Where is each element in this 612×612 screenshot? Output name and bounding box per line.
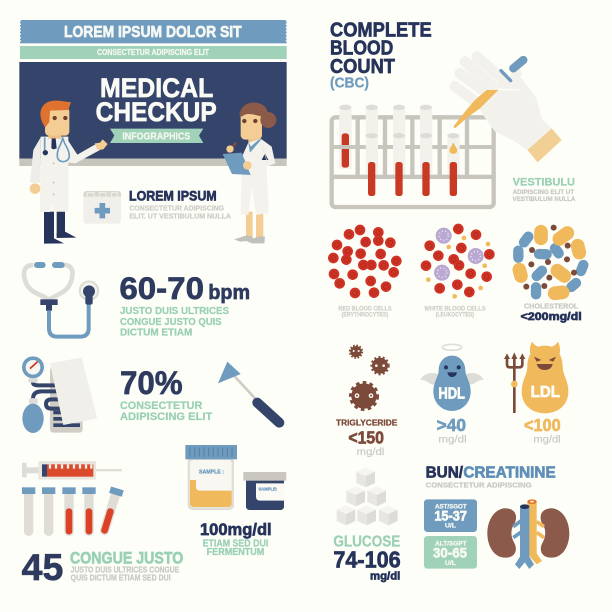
stat: 100mg/dl: ETIAM SED DUI: [203, 539, 269, 550]
label: cholesterol: CHOLESTEROL: [524, 304, 579, 311]
stat: triglyceride: [336, 418, 398, 458]
card: alt sgpt: [424, 536, 477, 569]
label: red blood cells: [338, 306, 392, 319]
icon: sample cup: [185, 445, 237, 510]
icon: sample container: [243, 472, 286, 510]
heading: bun creatinine: CONSECTETUR ADIPISCING: [426, 481, 532, 490]
panel: heart rate and blood pressure: [22, 262, 279, 433]
card: alt sgpt: 30-65: [433, 544, 467, 560]
male doctor: [30, 101, 108, 244]
stat: glucose: GLUCOSE: [333, 534, 400, 551]
text block: vestibulu: VESTIBULU: [513, 177, 575, 189]
text block: vestibulu: [513, 177, 576, 203]
heading: complete blood count: BLOOD: [330, 37, 393, 59]
stat: heart rate: [119, 271, 250, 339]
stat: 45 congue justo: JUSTO DUIS ULTRICES CONGUE: [71, 565, 180, 575]
heading: bun creatinine: BUN/: [426, 465, 464, 482]
text block: lorem ipsum: ELIT. UT VESTIBULUM NULLA: [129, 214, 231, 221]
ribbon: infographics: INFOGRAPHICS: [122, 131, 190, 142]
heading: medical checkup: CHECKUP: [96, 97, 217, 127]
heading: complete blood count: COMPLETE: [330, 19, 432, 41]
label: cholesterol: [521, 304, 582, 323]
stat: blood pressure: [120, 364, 212, 423]
stat: heart rate: 60-70: [119, 271, 204, 306]
banner: title: LOREM IPSUM DOLOR SIT: [64, 24, 242, 41]
panel: lipids: [336, 342, 568, 458]
banner: title: [20, 20, 287, 43]
chalkboard: [19, 62, 287, 166]
icon: syringe: [22, 461, 122, 480]
heading: complete blood count: COUNT: [330, 56, 395, 78]
stat: 100mg/dl: 100mg/dl: [200, 520, 272, 539]
icon: first aid kit: [83, 191, 121, 224]
panel: complete blood count: [330, 19, 576, 207]
panel: glucose and kidney: [333, 465, 569, 582]
icon: sample container: SAMPLE:: [258, 487, 278, 492]
icon: sample cup: SAMPLE :: [199, 470, 224, 476]
label: red blood cells: RED BLOOD CELLS: [338, 306, 392, 312]
stat: heart rate: DICTUM ETIAM: [120, 328, 192, 339]
panel: blood cells: [328, 224, 583, 323]
icon: hdl angel: HDL: [438, 386, 465, 403]
icon: stethoscope: [24, 262, 99, 337]
icon: reflex hammer: [218, 362, 279, 423]
stat: hdl: mg/dl: [438, 434, 467, 445]
icon: cholesterol: [518, 225, 583, 294]
stat: blood pressure: 70%: [120, 364, 183, 401]
stat: 45 congue justo: QUIS DICTUM ETIAM SED DUI: [71, 573, 171, 583]
icon: kidneys: [487, 499, 569, 569]
label: red blood cells: (ERYTHROCYTES): [342, 313, 388, 319]
heading: medical checkup: MEDICAL: [100, 73, 213, 103]
text block: lorem ipsum: [129, 188, 231, 221]
card: ast sgot: 15-37: [434, 507, 467, 523]
banner: subtitle: CONSECTETUR ADIPISCING ELIT: [97, 48, 209, 57]
stat: hdl: [437, 415, 467, 445]
stat: heart rate: JUSTO DUIS ULTRICES: [120, 306, 229, 317]
stat: ldl: mg/dl: [533, 434, 561, 445]
icon: red blood cells: [328, 225, 402, 298]
stat: glucose: [333, 534, 401, 582]
banner: subtitle: [20, 46, 287, 59]
text block: lorem ipsum: CONSECTETUR ADIPISCING: [129, 206, 224, 213]
text block: vestibulu: VESTIBULUM NULLA: [513, 196, 576, 203]
stat: ldl: [524, 415, 561, 445]
stat: triglyceride: mg/dl: [357, 447, 384, 458]
label: white blood cells: [424, 306, 486, 319]
stat: triglyceride: TRIGLYCERIDE: [336, 418, 398, 427]
stat: ldl: <100: [524, 415, 561, 435]
panel: medical checkup header: [19, 20, 287, 244]
card: ast sgot: AST/SGOT: [435, 503, 467, 510]
heading: bun creatinine: CREATININE: [463, 465, 556, 482]
icon: test tubes: [22, 486, 124, 537]
label: white blood cells: (LEUKOCYTES): [436, 313, 474, 319]
stat: heart rate: bpm: [208, 282, 250, 304]
label: white blood cells: WHITE BLOOD CELLS: [424, 306, 486, 312]
heading: complete blood count: [330, 19, 432, 92]
heading: medical checkup: [96, 73, 217, 127]
icon: sugar cubes: [337, 467, 398, 525]
icon: blood pressure monitor: [22, 356, 97, 433]
heading: bun creatinine: [426, 465, 556, 490]
card: ast sgot: [424, 499, 477, 532]
stat: hdl: >40: [437, 415, 466, 435]
label: cholesterol: <200mg/dl: [521, 311, 582, 323]
card: ast sgot: U/L: [445, 524, 456, 530]
panel: blood draw and sample: [22, 445, 286, 588]
icon: ldl devil: LDL: [531, 384, 560, 401]
stat: 100mg/dl: [200, 520, 272, 558]
stat: glucose: mg/dl: [370, 570, 400, 582]
card: alt sgpt: U/L: [445, 561, 456, 567]
icon: test tube rack: [332, 105, 494, 207]
stat: glucose: 74-106: [333, 546, 401, 572]
icon: hdl angel: [420, 344, 484, 411]
card: alt sgpt: ALT/SGPT: [435, 541, 467, 548]
stat: blood pressure: CONSECTETUR: [120, 400, 202, 412]
icon: triglyceride: [350, 345, 389, 410]
stat: 45 congue justo: CONGUE JUSTO: [70, 548, 183, 567]
icon: ldl devil: [504, 342, 568, 413]
stat: heart rate: CONGUE JUSTO QUIS: [120, 317, 222, 328]
text block: lorem ipsum: LOREM IPSUM: [129, 188, 217, 204]
ribbon: infographics: [110, 129, 203, 143]
icon: white blood cells: [421, 224, 495, 299]
stat: 100mg/dl: FERMENTUM: [207, 547, 264, 558]
stat: blood pressure: ADIPISCING ELIT: [120, 411, 212, 423]
stat: triglyceride: <150: [348, 427, 384, 447]
text block: vestibulu: ADIPISCING ELIT UT: [513, 189, 574, 196]
heading: complete blood count: (CBC): [330, 76, 369, 92]
female doctor: [223, 103, 276, 243]
stat: 45 congue justo: [22, 546, 183, 588]
icon: gloved hand with pipette: [453, 57, 562, 162]
stat: 45 congue justo: 45: [22, 546, 63, 588]
